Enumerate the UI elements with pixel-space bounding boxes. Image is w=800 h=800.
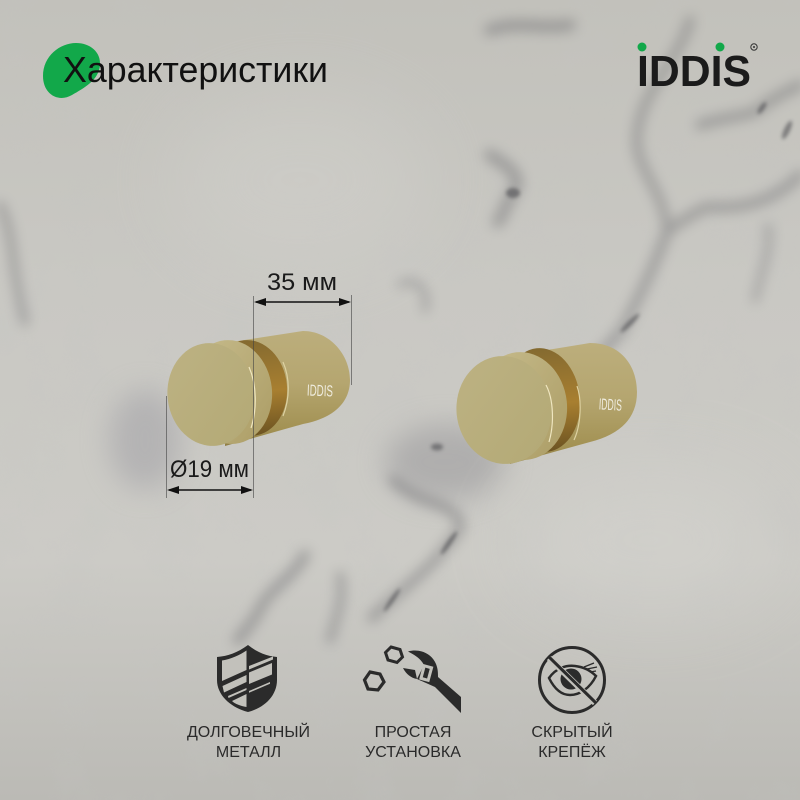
title: Характеристики [63,49,328,90]
dimension: 35 mm [254,269,352,498]
label: durable metal: МЕТАЛЛ [216,744,281,761]
knob body [510,343,637,464]
knob groove [206,336,292,440]
green blob [43,43,100,98]
icon: wrench [403,650,461,713]
icon: shield [217,645,277,712]
dimension: diameter 19 mm [166,396,253,498]
knob collar [183,336,277,448]
knob brand: IDDIS [307,383,333,400]
knob groove [499,344,585,456]
label: hidden fixing: СКРЫТЫЙ [531,722,613,741]
label: durable metal: ДОЛГОВЕЧНЫЙ [187,722,310,741]
knob face [451,351,557,469]
icon: hidden fixing [540,648,604,712]
knob left [162,331,350,450]
label: hidden fixing: КРЕПЁЖ [538,743,606,761]
knob body [225,331,350,446]
knob face [162,339,260,450]
knob collar [472,348,572,464]
dimension: diameter 19 mm: Ø19 мм [170,456,249,483]
label: easy installation: УСТАНОВКА [365,744,461,761]
icon: wrench and nuts [364,647,461,713]
logo: IDDIS: IDDIS [637,47,751,96]
icon: large nut [364,672,384,690]
dimension: 35 mm: 35 мм [267,269,337,296]
icon: small nut [386,647,402,662]
knob right [451,343,637,469]
label: easy installation: ПРОСТАЯ [375,724,451,741]
knob brand: IDDIS [598,396,622,415]
